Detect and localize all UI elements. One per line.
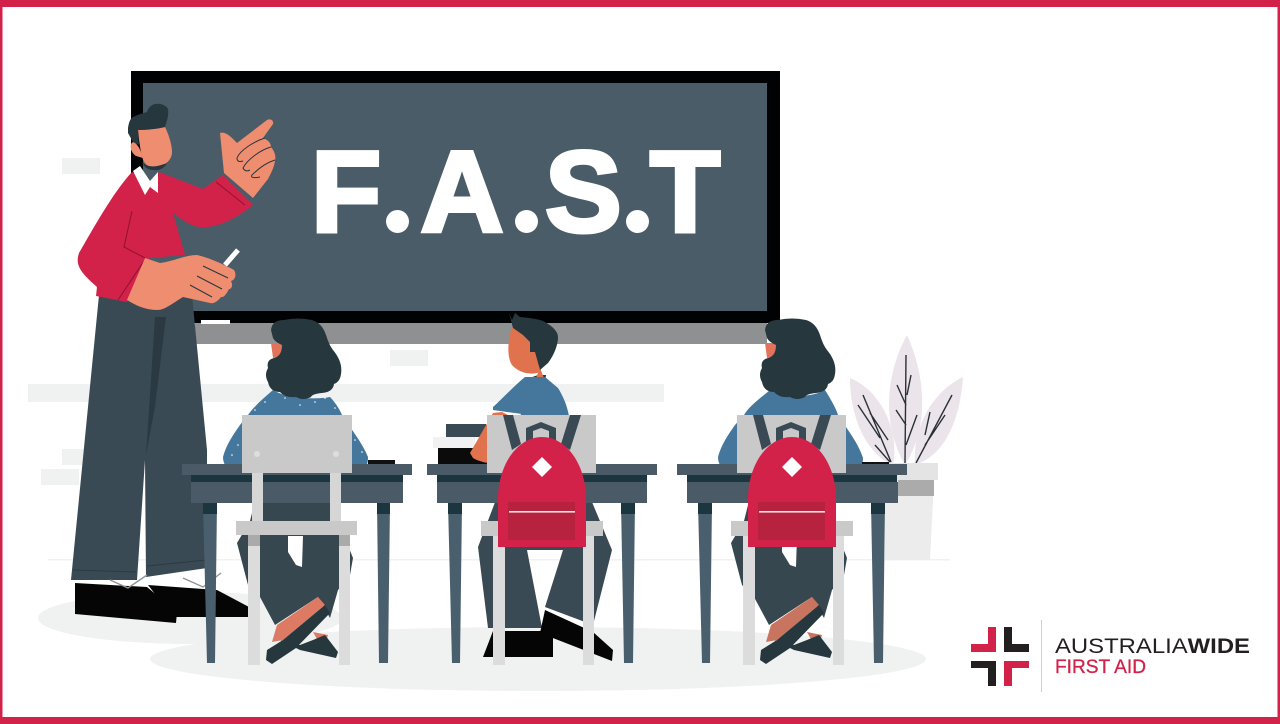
title: .: [388, 163, 407, 241]
laptop: [862, 462, 889, 465]
hair: [266, 318, 341, 399]
trousers: [237, 473, 353, 625]
chair: [236, 415, 357, 665]
chalk: [225, 250, 238, 265]
backpack: [748, 415, 836, 547]
title: .: [517, 163, 536, 241]
title: F: [311, 128, 381, 256]
pointing hand: [220, 119, 275, 198]
logo mark: [971, 627, 1029, 686]
backpack: [498, 415, 586, 547]
title: [311, 128, 720, 256]
trousers: [71, 295, 207, 580]
shoes: [483, 610, 613, 661]
books: [433, 424, 488, 464]
logo: [971, 620, 1250, 692]
chair: [731, 415, 853, 665]
plant: [850, 335, 963, 560]
chair: [481, 415, 603, 665]
trousers: [731, 473, 847, 625]
title: T: [650, 128, 720, 256]
shirt with dots: [223, 390, 368, 474]
crossed feet: [760, 597, 832, 664]
torso: [718, 390, 863, 474]
head: [128, 104, 172, 170]
desk: [677, 464, 907, 663]
desk: [182, 464, 412, 663]
teacher: [71, 104, 275, 623]
title: .: [628, 163, 647, 241]
shoes: [75, 573, 249, 623]
chalkboard: [131, 71, 780, 344]
logo text: First Aid: FIRST AID: [1055, 657, 1146, 678]
title: S: [545, 128, 622, 256]
boy head and torso: [470, 313, 569, 463]
hair: [760, 318, 835, 399]
student right: [677, 318, 907, 665]
logo text: Australia Wide: AUSTRALIA WIDE: [1055, 635, 1250, 658]
desk: [427, 464, 657, 663]
collar: [133, 166, 158, 195]
trousers: [478, 490, 612, 628]
sweater: [78, 172, 253, 302]
book: [368, 460, 395, 465]
lower hand: [127, 255, 235, 310]
title: A: [420, 128, 504, 256]
student left: [182, 318, 412, 665]
student centre: [427, 313, 657, 665]
crossed feet: [266, 597, 338, 664]
